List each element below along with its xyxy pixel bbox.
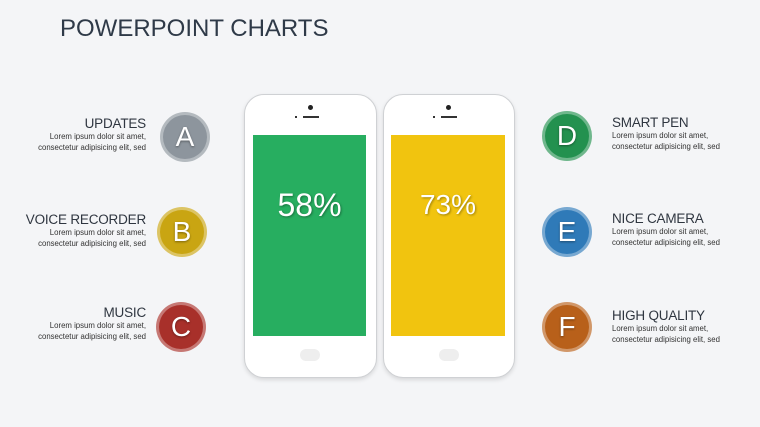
icon: E [542,207,592,257]
phone 1 [244,94,377,378]
icon: F: F [558,311,576,342]
phone 2 [383,94,515,378]
icon: B [157,207,207,257]
item: smart pen [612,115,720,151]
item: music [38,305,146,341]
item: high quality: HIGH QUALITY [612,308,705,323]
screen: 73%: 73% [420,189,476,220]
item: high quality: Lorem ipsum dolor sit amet, [612,324,708,333]
item: smart pen: SMART PEN [612,115,688,130]
item: updates: consectetur adipisicing elit, sed [38,143,146,152]
item: voice recorder: Lorem ipsum dolor sit amet, [50,228,146,237]
icon: F [542,302,592,352]
icon: C: C [171,311,191,342]
icon: D: D [557,120,577,151]
item: voice recorder: consectetur adipisicing elit, sed [38,239,146,248]
item: smart pen: consectetur adipisicing elit, sed [612,142,720,151]
item: music: MUSIC [104,305,146,320]
icon: A [160,112,210,162]
item: updates [38,116,146,152]
item: updates: Lorem ipsum dolor sit amet, [50,132,146,141]
item: music: consectetur adipisicing elit, sed [38,332,146,341]
icon: A: A [176,121,194,152]
icon: E: E [558,216,576,247]
icon: C [156,302,206,352]
screen: 73% [391,135,505,336]
item: nice camera: Lorem ipsum dolor sit amet, [612,227,708,236]
icon: D [542,111,592,161]
title: POWERPOINT CHARTS [60,15,328,42]
item: voice recorder: VOICE RECORDER [26,212,146,227]
screen: 58%: 58% [277,187,342,223]
screen: 58% [253,135,366,336]
item: high quality [612,308,720,344]
item: smart pen: Lorem ipsum dolor sit amet, [612,131,708,140]
item: high quality: consectetur adipisicing elit, sed [612,335,720,344]
icon: B: B [173,216,191,247]
item: nice camera: NICE CAMERA [612,211,704,226]
item: voice recorder [26,212,146,248]
item: nice camera [612,211,720,247]
item: updates: UPDATES [85,116,146,131]
item: music: Lorem ipsum dolor sit amet, [50,321,146,330]
item: nice camera: consectetur adipisicing elit, sed [612,238,720,247]
